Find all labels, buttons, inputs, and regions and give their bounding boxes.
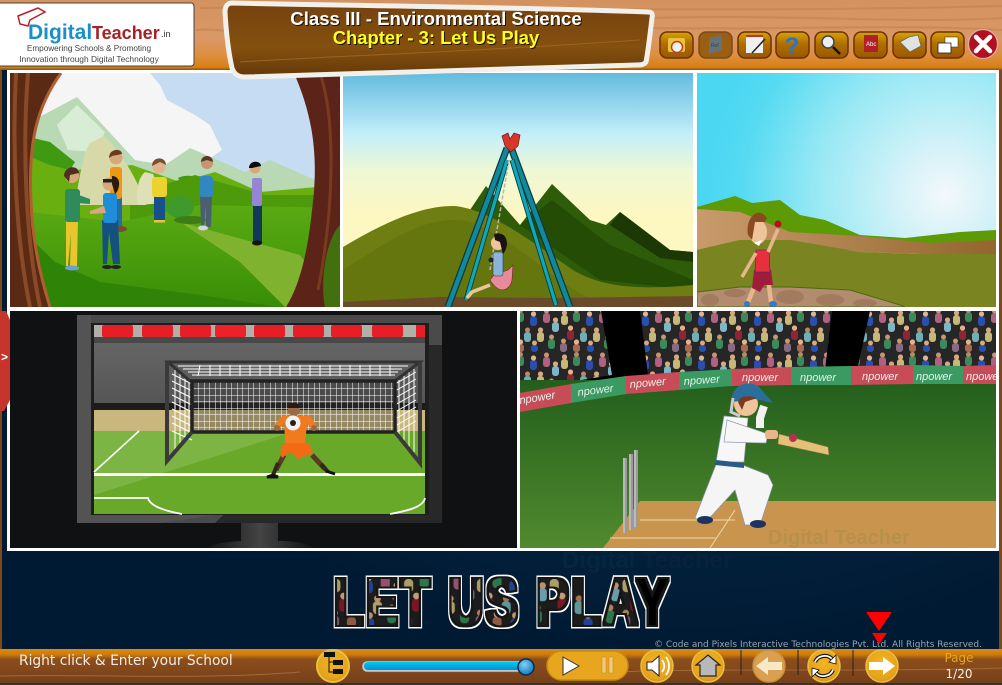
stadium crowd stands: [520, 311, 612, 390]
page counter: [944, 651, 974, 681]
batsman: [695, 383, 829, 528]
distant pale hills: [30, 97, 340, 230]
logo box: [0, 3, 194, 66]
button: reload: [808, 650, 840, 682]
figure: yellow B shirt: [152, 158, 167, 222]
screen glare: [77, 315, 215, 523]
button: reference book: Ref: [711, 43, 719, 49]
ground: [343, 296, 693, 307]
pitch: [603, 501, 996, 548]
logo box: Innovation through Digital Technology: [19, 54, 160, 64]
npower advertising boards: npower: [916, 371, 953, 383]
logo wordmark: Digital: [28, 21, 92, 44]
button: help: ?: [785, 33, 799, 60]
bat: [778, 434, 829, 455]
girl on swing: [467, 233, 513, 298]
npower advertising boards: [519, 365, 1002, 412]
figure: green shirt yellow trousers: [64, 167, 90, 270]
button: dictionary: [854, 32, 887, 58]
swing frame: [448, 133, 570, 307]
olive foreground hills: [343, 206, 693, 305]
head and helmet: [734, 392, 758, 416]
faint watermark: Digital Teacher: [768, 527, 910, 549]
button: contents tree: [317, 650, 349, 682]
figure: purple shirt: [249, 162, 262, 246]
page counter: Page: [944, 651, 974, 665]
button: next: [866, 650, 898, 682]
top wood bar: [0, 0, 1002, 70]
bright green rolling hills: [30, 138, 340, 307]
title plaque: [225, 3, 652, 77]
faint logo watermark on navy band: Digital Teacher: [562, 547, 732, 574]
button: sound: [641, 650, 673, 682]
npower advertising boards: npower: [519, 389, 557, 407]
dirt road: [697, 209, 996, 255]
boulders: [75, 136, 146, 205]
logo box: .in: [161, 29, 171, 39]
stumps: [624, 450, 636, 533]
button: help: [776, 32, 809, 60]
school prompt text: Right click & Enter your School: [19, 653, 233, 669]
logo: graduation cap: [18, 8, 45, 26]
monitor stand: [205, 523, 315, 548]
ball: [789, 434, 797, 442]
logo box: Teacher: [92, 23, 160, 43]
button: close: [968, 30, 998, 58]
meadow: [30, 205, 340, 307]
bush: [166, 196, 194, 218]
panel: children playing blindfold game in meadow: [10, 73, 340, 310]
button: notepad: [738, 32, 771, 58]
button: dictionary: Abc: [866, 42, 876, 48]
logo tagline: Empowering Schools & Promoting: [27, 44, 152, 53]
bottom wood bar: [0, 649, 1002, 685]
arm: [724, 420, 768, 443]
grass outfield: [520, 380, 996, 548]
left red side tab: [0, 311, 10, 411]
screen scene: [94, 325, 425, 514]
monitor frame: [77, 315, 442, 523]
lawn: [697, 240, 996, 307]
play and pause control: [547, 651, 628, 680]
toolbar: top icon buttons: [660, 30, 998, 60]
progress slider: [362, 659, 534, 675]
goalkeeper holding ball: [267, 403, 335, 477]
green ridge: [697, 196, 996, 250]
button: window resize: [931, 32, 964, 58]
panel: batsman in a cricket stadium: [519, 311, 1002, 549]
white frame behind the picture collage: [7, 70, 999, 551]
npower advertising boards: npower: [629, 376, 668, 391]
red pointer arrows: [866, 612, 892, 644]
button: reference book: [699, 32, 732, 58]
heading: LET US PLAY: LET US PLAY: [334, 565, 671, 640]
npower advertising boards: npower: [577, 383, 616, 399]
npower advertising boards: npower: [683, 373, 722, 388]
panel: girl on a swing: [343, 73, 693, 307]
npower advertising boards: npower: [862, 371, 899, 383]
title line 1: Class III - Environmental Science: [290, 8, 582, 29]
stone path: [697, 287, 905, 307]
pitch: [94, 431, 425, 514]
npower advertising boards: npower: [800, 372, 837, 384]
torso: [716, 416, 748, 462]
page counter: 1/20: [946, 667, 972, 681]
goal net and posts: [167, 362, 420, 463]
divider lines: [741, 650, 853, 676]
cloud: [40, 73, 222, 190]
button: home: [692, 650, 724, 682]
button: open book: [893, 32, 926, 58]
button: folder clock: [660, 32, 693, 58]
panel: boy running with a ball: [697, 73, 996, 307]
dark mountains: [470, 184, 693, 300]
copyright notice: © Code and Pixels Interactive Technologies Pvt. Ltd. All Rights Reserved.: [654, 640, 982, 650]
figure: orange shirt: [109, 150, 127, 232]
shadow: [174, 216, 206, 224]
figure: blue shirt blindfolded: [90, 176, 121, 269]
button: previous (disabled): [753, 650, 785, 682]
npower advertising boards: npower: [966, 371, 1002, 383]
button: magnifier: [815, 32, 848, 58]
swing chains: [490, 160, 509, 270]
tree trunk frame: [10, 73, 61, 307]
panel: goalkeeper on a television screen: [10, 311, 517, 548]
legs: [695, 462, 773, 525]
figure: blue striped shirt: [198, 156, 213, 230]
running boy: [742, 213, 782, 307]
npower advertising boards: npower: [742, 372, 779, 384]
left red side tab: >: [1, 350, 8, 364]
title line 2: Chapter - 3: Let Us Play: [333, 27, 540, 48]
red stadium seats: [94, 325, 425, 337]
